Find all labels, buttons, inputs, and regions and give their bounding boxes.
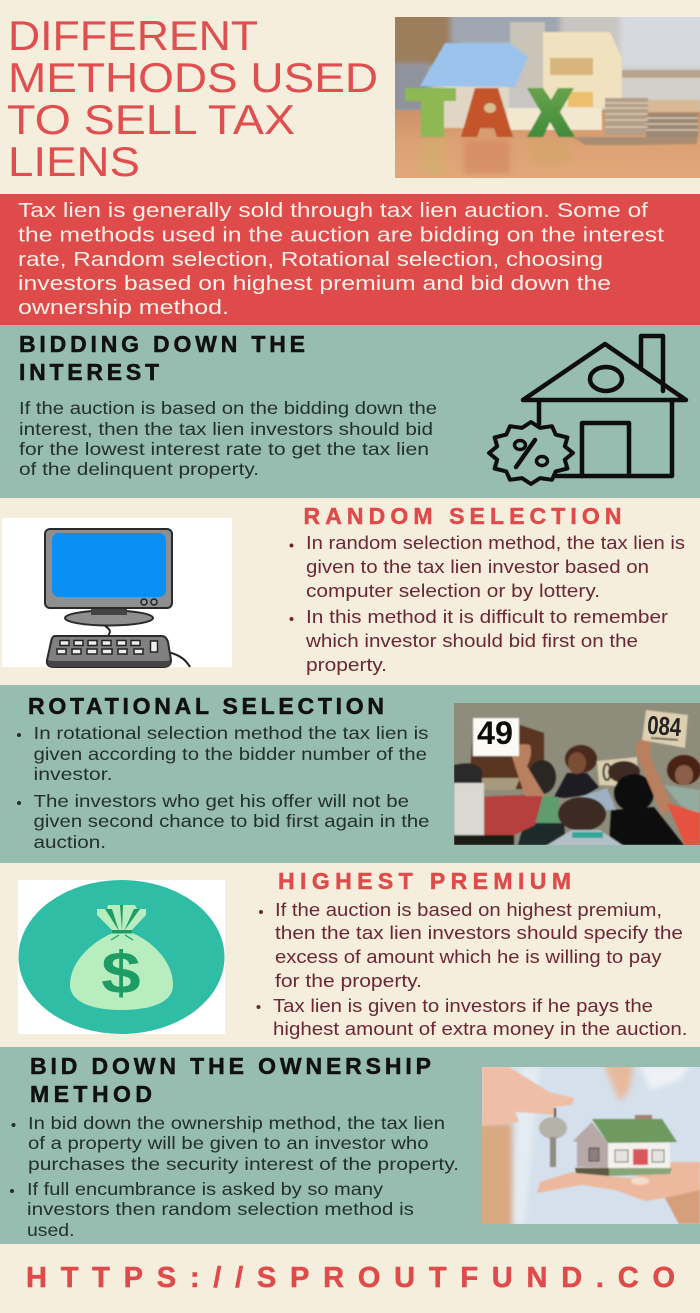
text block: bidding down explanation: for the lowest interest rate to get the tax lien [19, 439, 429, 459]
icon: money bag [18, 880, 225, 1034]
title: TO SELL TAX [7, 96, 295, 143]
bullet list: ownership method: investors then random selection method is [27, 1199, 414, 1219]
bullet list: rotational selection [17, 723, 430, 852]
text block: bidding down explanation: of the delinquent property. [19, 459, 259, 479]
bullet list: rotational selection: auction. [34, 832, 106, 852]
panel: introduction [0, 194, 700, 325]
heading: random selection: RANDOM SELECTION [304, 503, 622, 529]
heading: bidding down the interest: BIDDING DOWN THE [19, 331, 305, 357]
bullet list: ownership method: used. [27, 1220, 74, 1240]
bullet list: random selection: In this method it is difficult to remember [306, 607, 668, 627]
bullet list: ownership method: In bid down the ownership method, the tax lien [28, 1113, 445, 1133]
panel: introduction: Tax lien is generally sold through tax lien auction. Some of [18, 200, 649, 222]
heading: bid down the ownership method: METHOD [30, 1081, 152, 1107]
bullet list: rotational selection: The investors who get his offer will not be [34, 791, 409, 811]
text block: bidding down explanation: interest, then the tax lien investors should bid [19, 419, 433, 439]
panel: random selection [0, 498, 700, 685]
bullet list: ownership method: If full encumbrance is asked by so many [27, 1179, 383, 1199]
icon: house with percent badge [489, 336, 686, 484]
bullet list: ownership method: purchases the security interest of the property. [28, 1154, 459, 1174]
photo: tax letters with model house and coins [385, 7, 700, 178]
heading: bid down the ownership method: BID DOWN THE OWNERSHIP [30, 1053, 431, 1079]
panel: introduction: investors based on highest premium and bid down the [18, 273, 611, 295]
icon: dollar sign: $ [101, 940, 141, 1006]
panel: introduction: ownership method. [18, 297, 229, 319]
panel: highest premium [0, 863, 700, 1047]
bullet list: random selection: In random selection method, the tax lien is [306, 533, 685, 553]
bullet list: random selection: property. [306, 655, 387, 675]
panel: bid down the ownership method [0, 1047, 700, 1244]
bullet list: random selection: computer selection or by lottery. [306, 581, 600, 601]
photo: auction bidders raising paddles [454, 703, 700, 847]
bullet list: highest premium: If the auction is based on highest premium, [275, 900, 662, 920]
title: METHODS USED [8, 54, 378, 101]
text block: bidding down explanation [19, 398, 437, 479]
bullet list: highest premium: excess of amount which he is willing to pay [275, 947, 662, 967]
text block: bidding down explanation: If the auction is based on the bidding down the [19, 398, 437, 418]
panel: introduction: rate, Random selection, Rotational selection, choosing [18, 249, 603, 271]
bullet list: highest premium: then the tax lien investors should specify the [275, 923, 683, 943]
bullet list: random selection: which investor should bid first on the [305, 631, 638, 651]
panel: bidding down the interest [0, 325, 700, 498]
heading: highest premium: HIGHEST PREMIUM [278, 868, 571, 894]
photo: hands holding key and model house [482, 1067, 700, 1224]
panel: rotational selection [0, 685, 700, 863]
bullet list: rotational selection: given according to the bidder number of the [34, 744, 427, 764]
panel: introduction: the methods used in the auction are bidding on the interest [18, 224, 665, 246]
title [7, 12, 378, 185]
bullet list: highest premium: Tax lien is given to investors if he pays the [273, 996, 653, 1016]
photo: bidder paddle 49: 49 [477, 715, 513, 751]
bullet list: random selection [290, 533, 685, 675]
photo: bidder paddle 084: 084 [646, 710, 683, 742]
heading: bid down the ownership method [30, 1053, 431, 1107]
bullet list: highest premium: highest amount of extra money in the auction. [273, 1019, 688, 1039]
bullet list: highest premium [256, 900, 688, 1039]
title: DIFFERENT [8, 12, 258, 59]
bullet list: rotational selection: In rotational selection method the tax lien is [34, 723, 429, 743]
bullet list: rotational selection: investor. [34, 764, 112, 784]
bullet list: ownership method [10, 1113, 459, 1240]
bullet list: random selection: given to the tax lien investor based on [306, 557, 649, 577]
icon: desktop computer [2, 518, 232, 667]
bullet list: highest premium: for the property. [275, 971, 422, 991]
heading: bidding down the interest: INTEREST [19, 359, 159, 385]
title: LIENS [8, 138, 140, 185]
footer: website address: HTTPS://SPROUTFUND.CO [26, 1262, 675, 1294]
bullet list: ownership method: of a property will be given to an investor who [28, 1133, 428, 1153]
heading: bidding down the interest [19, 331, 305, 385]
bullet list: rotational selection: given second chance to bid first again in the [34, 811, 430, 831]
heading: rotational selection: ROTATIONAL SELECTION [28, 693, 384, 719]
